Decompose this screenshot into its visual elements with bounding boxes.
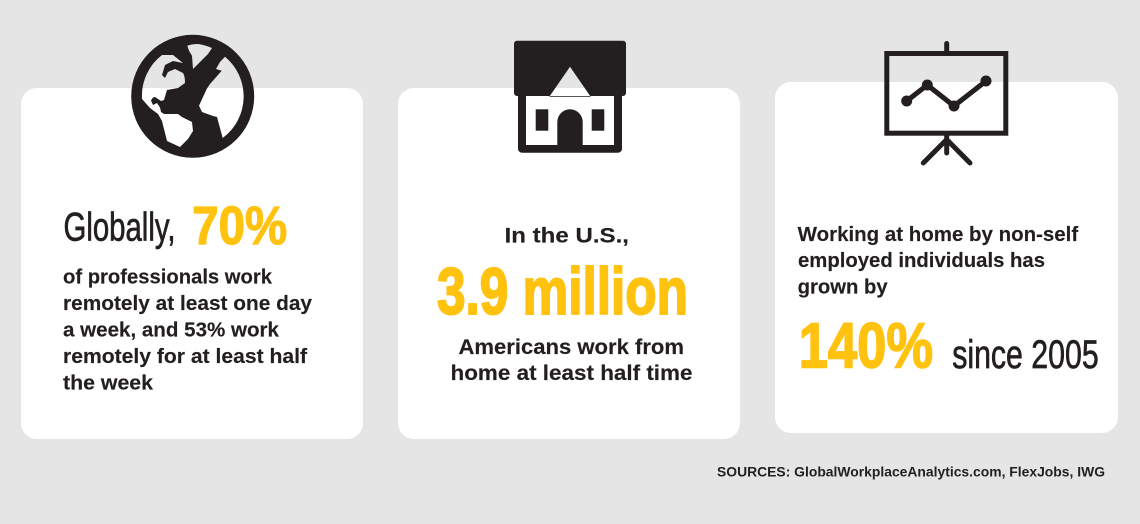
big number: 140% since 2005: since 2005 — [952, 333, 1099, 377]
big number: 140% since 2005 — [799, 310, 1099, 382]
text block: global statistic: remotely for at least half — [63, 346, 307, 368]
panel: growth of home working — [775, 82, 1118, 433]
heading: In the U.S.,: In the U.S., — [504, 224, 629, 247]
text block: global statistic: remotely at least one day — [63, 293, 313, 315]
icon: globe — [131, 35, 254, 158]
big number: 3.9 million: 3.9 million — [437, 254, 688, 328]
text block: Americans: Americans work from — [458, 336, 684, 359]
text block: growth statement: Working at home by non-self — [798, 224, 1079, 246]
text block: growth statement — [798, 224, 1079, 298]
text block: growth statement: employed individuals has — [798, 250, 1045, 272]
heading: Globally, 70%: Globally, — [64, 206, 176, 250]
text block: global statistic: of professionals work — [63, 266, 273, 288]
text block: global statistic: a week, and 53% work — [63, 320, 280, 342]
text block: Americans — [450, 336, 692, 385]
heading: Globally, 70%: 70% — [192, 196, 287, 256]
text block: global statistic: the week — [63, 372, 154, 394]
text block: global statistic — [63, 266, 313, 394]
icon: house — [514, 41, 626, 153]
panel: global remote work — [21, 88, 363, 439]
sources note: SOURCES: GlobalWorkplaceAnalytics.com, FlexJobs, IWG — [717, 465, 1105, 480]
text block: growth statement: grown by — [798, 276, 889, 298]
icon: presentation board with line chart — [887, 44, 1006, 163]
heading: Globally, 70% — [64, 196, 287, 256]
panel: U.S. remote work — [398, 88, 740, 439]
big number: 140% since 2005: 140% — [799, 310, 933, 382]
text block: Americans: home at least half time — [450, 362, 692, 385]
